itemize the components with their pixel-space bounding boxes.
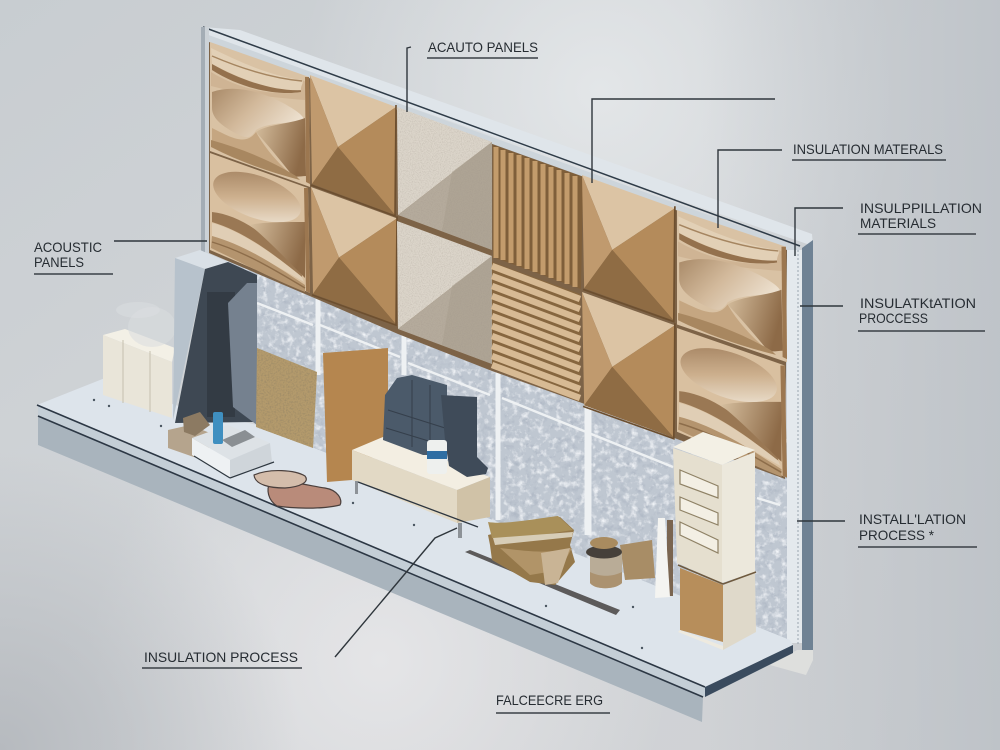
callout: acauto panels: ACAUTO PANELS — [428, 39, 538, 55]
callout: acauto panels — [407, 39, 538, 112]
callout: insulation materals: INSULATION MATERALS — [793, 141, 943, 157]
bench — [352, 437, 490, 538]
dark tower — [173, 250, 257, 425]
wave panel lower right — [673, 328, 787, 478]
small equipment box — [168, 412, 274, 478]
callout: insulation process: PROCCESS — [859, 310, 928, 326]
callout: insulation process lower: INSULATION PROCESS — [144, 649, 298, 665]
callout: insulpillation materials — [795, 200, 982, 256]
floor slab — [37, 378, 793, 722]
callout: insulpillation materials: MATERIALS — [860, 215, 936, 231]
acoustic panels — [207, 42, 787, 478]
vertical ribbed panel — [493, 145, 583, 289]
light fabric panel 1 — [397, 107, 492, 250]
floor mats — [254, 471, 341, 508]
concrete wall — [209, 240, 790, 642]
cork board — [256, 348, 317, 448]
callout: insulation process lower — [142, 528, 457, 668]
callout: installation process: PROCESS * — [859, 527, 935, 543]
caption: falceecre erg: FALCEECRE ERG — [496, 692, 603, 708]
right drawer cabinet — [673, 432, 756, 650]
boot — [441, 395, 488, 477]
callout: insulation process — [800, 295, 985, 331]
mortar joints — [257, 298, 780, 535]
wave panel upper left — [210, 42, 310, 187]
light fabric panel 2 — [397, 221, 492, 364]
callout: installation process — [797, 511, 977, 547]
callout: insulation materals — [718, 141, 946, 228]
white storage cabinet left — [103, 302, 176, 418]
pyramid panel 1 — [310, 75, 396, 216]
white bottle — [427, 440, 447, 474]
right wall edge — [770, 240, 813, 675]
callout: acoustic panels: ACOUSTIC — [34, 239, 102, 255]
wave panel lower left — [207, 153, 310, 293]
tan board — [323, 348, 388, 482]
debris pile and ruler — [465, 516, 620, 615]
callout: insulation process: INSULATKtATION — [860, 295, 976, 311]
horizontal ribbed panel — [492, 262, 580, 402]
leader line: top centre — [592, 99, 775, 183]
callout: insulpillation materials: INSULPPILLATION — [860, 200, 982, 216]
callout: installation process: INSTALL'LATION — [859, 511, 966, 527]
jar — [586, 537, 655, 588]
wave panel upper right — [677, 210, 787, 362]
callout: acoustic panels: PANELS — [34, 254, 84, 270]
white cone — [655, 518, 673, 598]
panel backing and shadow — [209, 42, 787, 479]
dark blocks on bench — [383, 375, 488, 477]
pyramid panel 4 — [582, 292, 675, 439]
callout: acoustic panels — [34, 239, 207, 274]
wall top trim — [201, 27, 813, 258]
pyramid panel 3 — [582, 175, 675, 322]
pyramid panel 2 — [311, 187, 397, 325]
